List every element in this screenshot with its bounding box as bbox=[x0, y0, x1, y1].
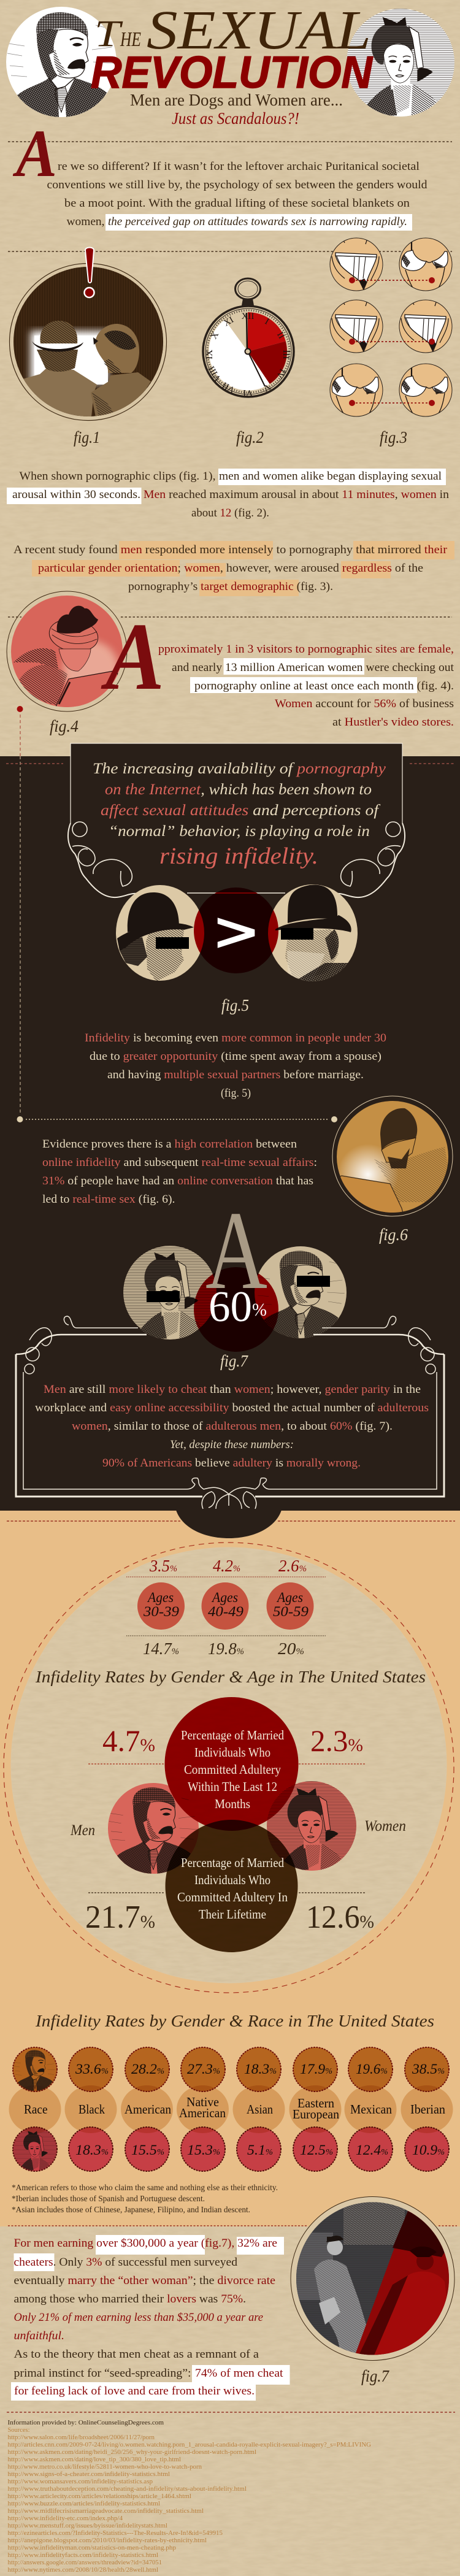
dial numerals: II bbox=[275, 331, 286, 340]
dark semicircle tab bbox=[176, 1510, 282, 1538]
credits and sources: http://anepigone.blogspot.com/2010/03/infidelity-rates-by-ethnicity.html bbox=[7, 2537, 207, 2544]
text: infidelity under 30: Infidelity is becoming even more common in people under 30 bbox=[85, 1032, 386, 1045]
fig 5: young man greater than old man bbox=[116, 884, 358, 981]
text: men earning: As to the theory that men cheat as a remnant of a bbox=[13, 2348, 259, 2361]
text: evidence: online infidelity and subsequent real-time sexual affairs : bbox=[42, 1156, 317, 1169]
title: HE bbox=[120, 28, 141, 51]
header bbox=[6, 0, 454, 128]
dial numerals: VIII bbox=[207, 364, 223, 383]
dial numerals: VII bbox=[221, 380, 237, 395]
text: men more likely to cheat: Men are still more likely to cheat than women; however, gender parity in the bbox=[44, 1383, 421, 1396]
men portrait bbox=[108, 1783, 199, 1874]
dial numerals: III bbox=[281, 350, 291, 359]
dial numerals bbox=[205, 312, 291, 397]
intro paragraph: conventions we still live by, the psychology of sex between the genders would bbox=[47, 178, 427, 191]
text: men more likely to cheat: women, similar to those of adulterous men , to about 60% (fig. 7). bbox=[72, 1420, 393, 1433]
credits and sources: http://ezinearticles.com/?Infidelity-Statistics---The-Results-Are-In!&id=549915 bbox=[7, 2530, 223, 2537]
subtitle question: Just as Scandalous?! bbox=[172, 109, 299, 128]
60 percent: 60 bbox=[209, 1283, 252, 1331]
fig 3: underwear grid bbox=[330, 238, 452, 416]
credits and sources bbox=[7, 2420, 371, 2574]
right flourish bbox=[334, 822, 405, 897]
panel: infidelity by gender and race bbox=[9, 2012, 453, 2215]
race labels: American bbox=[125, 2102, 171, 2117]
credits and sources: http://www.buzzle.com/articles/infidelity-statistics.html bbox=[7, 2501, 160, 2507]
dial numerals: IX bbox=[205, 350, 215, 359]
text: arousal timing: about 12 (fig. 2). bbox=[191, 507, 269, 519]
credits and sources: http://www.truthaboutdeception.com/cheating-and-infidelity/stats-about-infidelity.html bbox=[7, 2486, 247, 2493]
dial numerals: IV bbox=[274, 367, 287, 380]
text: infidelity under 30: due to greater opportunity (time spent away from a spouse) bbox=[90, 1050, 381, 1063]
text: evidence: Evidence proves there is a high correlation between bbox=[42, 1138, 297, 1151]
row 2 bbox=[330, 300, 452, 353]
exclamation mark bbox=[85, 248, 94, 297]
fig 6: man at laptop bbox=[331, 1096, 454, 1221]
credits and sources: http://www.salon.com/life/broadsheet/2006/11/27/porn bbox=[7, 2434, 155, 2441]
text: men earning: among those who married their lovers was 75%. bbox=[13, 2293, 246, 2306]
age row: bottom percentages: 14.7% bbox=[143, 1639, 179, 1658]
text: recent study bbox=[13, 541, 454, 596]
connector dotted line bbox=[17, 1116, 337, 1122]
text: recent study: particular gender orientation ; women, however, were aroused regardless of the bbox=[38, 562, 423, 575]
men percentages: 18.3% bbox=[244, 2061, 277, 2077]
fig 7: adultery 60 percent bbox=[123, 1188, 347, 1352]
past year text: Percentage of Married bbox=[181, 1728, 284, 1742]
text: evidence: led to real-time sex (fig. 6). bbox=[42, 1193, 175, 1206]
quote: The increasing availability of pornography bbox=[93, 761, 386, 777]
men percentages: 27.3% bbox=[187, 2061, 220, 2077]
race labels: Iberian bbox=[410, 2102, 445, 2117]
past year text: Individuals Who bbox=[194, 1745, 270, 1760]
age labels bbox=[143, 1590, 309, 1619]
quote: affect sexual attitudes and perceptions of bbox=[101, 802, 380, 819]
lifetime text: Percentage of Married bbox=[181, 1855, 284, 1870]
fig 1: two men at a screen bbox=[10, 248, 167, 423]
women percentages: 15.3% bbox=[187, 2142, 220, 2158]
drop cap A: A bbox=[13, 116, 57, 191]
dial numerals: X bbox=[209, 330, 221, 341]
text: infidelity under 30: (fig. 5) bbox=[221, 1087, 251, 1100]
fig 4 label: fig.4 bbox=[50, 717, 79, 735]
text: recent study: pornography’s target demographic (fig. 3). bbox=[128, 580, 333, 593]
60 percent: % bbox=[252, 1300, 267, 1320]
age labels: Ages bbox=[147, 1590, 174, 1605]
portrait: woman bbox=[347, 9, 454, 117]
intro paragraph: re we so different? If it wasn’t for the leftover archaic Puritanical societal bbox=[58, 160, 420, 173]
top left flourish bbox=[16, 1316, 147, 1374]
quote: on the Internet , which has been shown to bbox=[105, 781, 372, 798]
text: men earning: eventually marry the “other woman” ; the divorce rate bbox=[13, 2274, 275, 2287]
woman portrait bbox=[123, 1245, 217, 1340]
men circles bbox=[13, 2047, 449, 2091]
text: visitors: pornography online at least once each month (fig. 4). bbox=[194, 680, 454, 692]
fig 4: woman reading bbox=[7, 591, 127, 718]
age labels: 40-49 bbox=[208, 1604, 244, 1619]
quote bbox=[93, 761, 386, 869]
past year circle bbox=[164, 1697, 298, 1831]
age row: top percentages bbox=[149, 1557, 307, 1575]
footnotes: *Iberian includes those of Spanish and Portuguese descent. bbox=[12, 2195, 205, 2204]
woman icon bbox=[13, 2128, 56, 2171]
censor bars bbox=[156, 928, 313, 949]
title bbox=[91, 0, 373, 98]
credits and sources: http://www.womansavers.com/infidelity-statistics.asp bbox=[7, 2478, 153, 2485]
lifetime text: Their Lifetime bbox=[199, 1907, 266, 1922]
credits and sources: http://articles.cnn.com/2009-07-24/living/o.women.watching.porn_1_arousal-candida-royalle-explicit-sexual-imagery?_s=PM:LIVING bbox=[7, 2442, 371, 2448]
men percentages: 19.6% bbox=[356, 2061, 388, 2077]
intro paragraph: the perceived gap on attitudes towards sex is narrowing rapidly. bbox=[108, 215, 407, 228]
dial numerals: VI bbox=[243, 388, 253, 397]
credits and sources: http://www.askmen.com/dating/love_tip_300/380_love_tip.html bbox=[7, 2456, 181, 2463]
credits and sources: http://www.menstuff.org/issues/byissue/infidelitystats.html bbox=[7, 2523, 167, 2529]
connector dot and line bbox=[17, 706, 23, 1114]
men percentages: 33.6% bbox=[75, 2061, 109, 2077]
text: men more likely to cheat: Yet, despite these numbers: bbox=[170, 1438, 294, 1451]
race labels: Native bbox=[186, 2095, 219, 2109]
credits and sources: http://www.signs-of-a-cheater.com/infidelity-statistics.html bbox=[7, 2471, 170, 2478]
fig 6 label: fig.6 bbox=[379, 1225, 408, 1244]
race labels: Asian bbox=[247, 2102, 273, 2117]
text: men earning: cheaters. Only 3% of successful men surveyed bbox=[13, 2256, 238, 2269]
women percentages: 5.1% bbox=[247, 2142, 273, 2158]
stat percentages bbox=[85, 1723, 374, 1935]
intro paragraph: be a moot point. With the gradual lifting of these societal blankets on bbox=[64, 197, 410, 210]
race labels: European bbox=[293, 2107, 339, 2122]
women percentages: 12.5% bbox=[300, 2142, 333, 2158]
women circles bbox=[13, 2127, 449, 2171]
age row: top percentages: 2.6% bbox=[278, 1557, 307, 1575]
text: evidence: 31% of people have had an online conversation that has bbox=[42, 1175, 313, 1187]
age row: bottom percentages bbox=[143, 1639, 304, 1658]
race labels: Mexican bbox=[350, 2102, 392, 2117]
past year text: Within The Last 12 bbox=[188, 1779, 277, 1794]
credits and sources: Sources: bbox=[7, 2427, 30, 2434]
age row: bottom percentages: 20% bbox=[278, 1639, 304, 1658]
text: men earning: for feeling lack of love and care from their wives. bbox=[14, 2385, 255, 2398]
text: men more likely to cheat: 90% of Americans believe adultery is morally wrong. bbox=[102, 1457, 361, 1470]
fig 7b: man and woman scene bbox=[291, 2197, 460, 2361]
row 1 bbox=[330, 238, 452, 291]
women percentages: 12.4% bbox=[356, 2142, 388, 2158]
portrait: man bbox=[6, 7, 117, 117]
credits and sources: http://www.infidelity-etc.com/index.php/4 bbox=[7, 2515, 123, 2522]
red circle bbox=[194, 1267, 278, 1352]
credits and sources: Information provided by: OnlineCounselingDegrees.com bbox=[7, 2420, 164, 2426]
fig 2 label: fig.2 bbox=[236, 428, 264, 447]
heading: Infidelity Rates by Gender & Age in The United States bbox=[35, 1668, 426, 1686]
credits and sources: http://www.metro.co.uk/lifestyle/52811-women-who-love-to-watch-porn bbox=[7, 2464, 202, 2471]
stat percentages: 4.7% bbox=[102, 1723, 155, 1758]
fig 7b label: fig.7 bbox=[361, 2367, 389, 2385]
age circles bbox=[137, 1582, 314, 1630]
text: recent study: A recent study found men responded more intensely to pornography that mirrored their bbox=[13, 543, 448, 556]
censor bars bbox=[147, 1276, 330, 1302]
subtitle: Men are Dogs and Women are... bbox=[130, 91, 343, 109]
intro paragraph: women, bbox=[66, 215, 104, 228]
text: visitors: and nearly 13 million American women were checking out bbox=[172, 661, 454, 674]
race labels: Eastern bbox=[297, 2096, 334, 2110]
dial numerals: I bbox=[263, 316, 270, 327]
man icon bbox=[14, 2050, 55, 2091]
race label circles bbox=[9, 2085, 453, 2133]
text: men earning: Only 21% of men earning less than $35,000 a year are bbox=[13, 2311, 263, 2324]
race labels: Black bbox=[79, 2102, 105, 2117]
men percentages bbox=[75, 2061, 445, 2077]
credits and sources: http://www.nytimes.com/2008/10/28/health/28well.html bbox=[7, 2567, 158, 2574]
text: arousal timing: men and women alike began displaying sexual bbox=[219, 470, 442, 483]
heading: Infidelity Rates by Gender & Race in The United States bbox=[35, 2012, 434, 2030]
row 3 bbox=[330, 364, 452, 416]
title: T bbox=[94, 13, 123, 55]
letter A: A bbox=[205, 1188, 267, 1313]
stat percentages: 2.3% bbox=[310, 1723, 363, 1758]
credits and sources: http://www.midlifecrisismarriageadvocate.com/infidelity_statistics.html bbox=[7, 2508, 204, 2515]
dial numerals: V bbox=[261, 381, 272, 393]
text: arousal timing: arousal within 30 seconds. bbox=[12, 488, 140, 501]
quote: “normal” behavior, is playing a role in bbox=[109, 823, 370, 840]
drop cap A (fig 4): A bbox=[101, 603, 164, 710]
race labels: Race bbox=[24, 2102, 48, 2117]
past year text: Months bbox=[215, 1796, 250, 1811]
past year text bbox=[181, 1728, 284, 1811]
text: men earning: primal instinct for “seed-spreading”: bbox=[13, 2367, 191, 2380]
text: infidelity under 30: and having multiple sexual partners before marriage. bbox=[107, 1068, 364, 1081]
text: arousal timing: When shown pornographic clips (fig. 1), bbox=[20, 470, 216, 483]
title: REVOLUTION bbox=[91, 48, 373, 98]
gender labels: Women bbox=[364, 1818, 406, 1834]
text: visitors: Women account for 56% of business bbox=[275, 697, 454, 710]
left flourish bbox=[68, 822, 139, 897]
women percentages: 15.5% bbox=[131, 2142, 164, 2158]
text: visitors: pproximately 1 in 3 visitors to pornographic sites are female, bbox=[158, 643, 454, 656]
text: evidence bbox=[42, 1138, 317, 1206]
credits and sources: http://www.infidelityfacts.com/infidelity-statistics.html bbox=[7, 2552, 158, 2559]
dial numerals: XI bbox=[222, 315, 236, 328]
text: men earning bbox=[11, 2235, 289, 2401]
greater-than circle bbox=[194, 887, 278, 973]
text: men more likely to cheat: workplace and easy online accessibility boosted the actual number of adulterous bbox=[35, 1401, 429, 1414]
past year text: Committed Adultery bbox=[184, 1762, 281, 1777]
men percentages: 17.9% bbox=[300, 2061, 332, 2077]
race labels bbox=[24, 2095, 445, 2122]
fig 5 label: fig.5 bbox=[221, 996, 249, 1014]
greater-than sign: > bbox=[215, 902, 257, 962]
women percentages: 10.9% bbox=[412, 2142, 445, 2158]
footnotes: *American refers to those who claim the same and nothing else as their ethnicity. bbox=[12, 2183, 278, 2193]
gender labels: Men bbox=[70, 1822, 95, 1839]
stat percentages: 12.6% bbox=[306, 1899, 374, 1935]
text: men earning: unfaithful. bbox=[13, 2329, 64, 2342]
stat percentages: 21.7% bbox=[85, 1899, 155, 1935]
age labels: 50-59 bbox=[273, 1604, 309, 1619]
age row: top percentages: 4.2% bbox=[213, 1557, 240, 1575]
credits and sources: http://www.askmen.com/dating/heidi_250/256_why-your-girlfriend-doesnt-watch-porn.html bbox=[7, 2449, 256, 2456]
credits and sources: http://www.infidelityman.com/statistics-on-men-cheating.php bbox=[7, 2545, 176, 2551]
credits and sources: http://www.articlecity.com/articles/relationships/article_1464.shtml bbox=[7, 2493, 191, 2500]
footnotes: *Asian includes those of Chinese, Japanese, Filipino, and Indian descent. bbox=[12, 2206, 250, 2215]
lifetime text: Committed Adultery In bbox=[177, 1890, 288, 1904]
age row: top percentages: 3.5% bbox=[149, 1557, 177, 1575]
text: visitors bbox=[158, 643, 454, 729]
quote: rising infidelity. bbox=[159, 843, 318, 869]
text: visitors: at Hustler's video stores. bbox=[332, 716, 454, 729]
lifetime text: Individuals Who bbox=[194, 1873, 270, 1887]
age labels: 30-39 bbox=[143, 1604, 180, 1619]
age labels: Ages bbox=[211, 1590, 238, 1605]
men percentages: 38.5% bbox=[412, 2061, 445, 2077]
age row: bottom percentages: 19.8% bbox=[208, 1639, 244, 1658]
dark quote panel bbox=[6, 743, 454, 897]
lifetime circle bbox=[166, 1820, 298, 1952]
lifetime text bbox=[177, 1855, 288, 1922]
text: arousal timing bbox=[7, 469, 450, 519]
women percentages bbox=[75, 2142, 445, 2158]
intro paragraph bbox=[13, 116, 427, 231]
fig 7 label: fig.7 bbox=[220, 1352, 248, 1370]
title: SEXUAL bbox=[147, 0, 371, 61]
text: men earning: 74% of men cheat bbox=[195, 2367, 283, 2380]
text: men more likely to cheat bbox=[35, 1383, 429, 1470]
top right flourish bbox=[313, 1316, 444, 1374]
gender labels bbox=[70, 1818, 406, 1839]
young man bbox=[116, 885, 204, 981]
credits and sources: http://answers.google.com/answers/threadview?id=347051 bbox=[7, 2559, 162, 2566]
women portrait bbox=[267, 1781, 356, 1871]
text: men earning: For men earning over $300,000 a year (fig.7), 32% are bbox=[13, 2237, 277, 2250]
fig 1 label: fig.1 bbox=[74, 428, 100, 447]
old man bbox=[268, 884, 358, 981]
lower frame bbox=[16, 1316, 444, 1509]
women percentages: 18.3% bbox=[75, 2142, 109, 2158]
dial numerals: XII bbox=[242, 312, 254, 321]
bottom centre ornament bbox=[192, 1478, 266, 1509]
footnotes bbox=[12, 2183, 278, 2215]
race labels: American bbox=[179, 2106, 226, 2120]
panel: infidelity by gender and age bbox=[4, 1543, 454, 1993]
age labels: Ages bbox=[276, 1590, 303, 1605]
text: infidelity under 30 bbox=[85, 1032, 386, 1100]
highlight bbox=[105, 214, 412, 231]
fig 2: stopwatch bbox=[203, 278, 294, 397]
men percentages: 28.2% bbox=[131, 2061, 164, 2077]
man portrait bbox=[255, 1246, 347, 1338]
text: arousal timing: Men reached maximum arousal in about 11 minutes, women in bbox=[144, 488, 450, 501]
fig 3 label: fig.3 bbox=[380, 428, 407, 447]
